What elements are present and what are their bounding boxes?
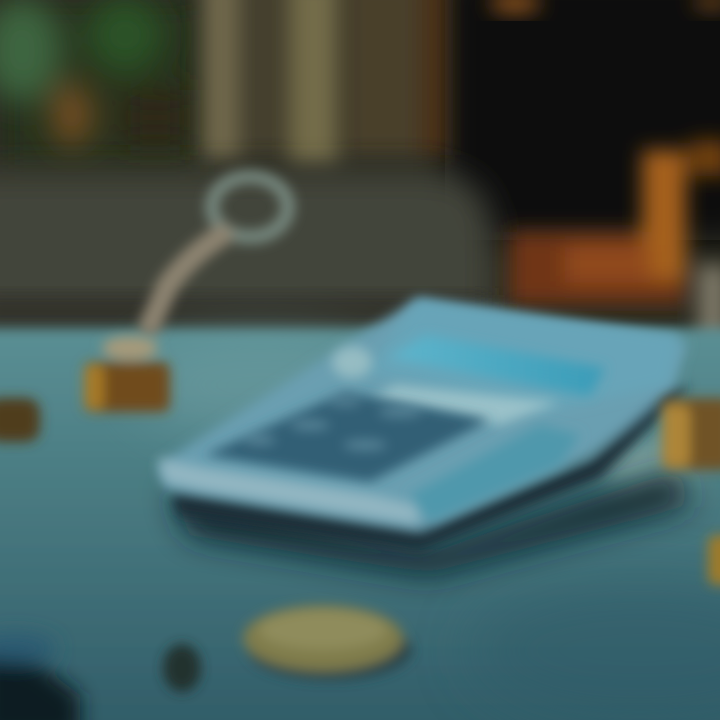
distant orange lights — [489, 0, 720, 14]
table surface — [0, 328, 720, 720]
small dark object — [163, 644, 201, 692]
teal lower right panel — [410, 425, 580, 522]
calculator — [158, 298, 690, 550]
keypad highlights — [244, 398, 422, 450]
coins right — [662, 398, 720, 585]
calculator screen — [388, 335, 605, 396]
curtain pillars — [202, 0, 446, 165]
coin flat front — [243, 605, 412, 680]
orange chair frame — [510, 140, 720, 355]
plant foliage — [0, 0, 190, 147]
calculator keypad — [205, 392, 490, 482]
calculator base — [158, 300, 690, 550]
sofa — [0, 172, 492, 325]
calculator front edge glare — [158, 458, 420, 525]
sofa base shadow — [0, 295, 490, 325]
pale band below screen — [370, 385, 560, 425]
calculator top panel — [365, 298, 680, 412]
coin stack left — [84, 336, 170, 412]
calculator shadow — [170, 470, 690, 575]
magnifying glass — [150, 177, 288, 325]
dark object bottom left — [0, 634, 80, 720]
left glare — [332, 346, 372, 378]
coin far left — [0, 398, 40, 442]
background wall — [0, 0, 720, 340]
